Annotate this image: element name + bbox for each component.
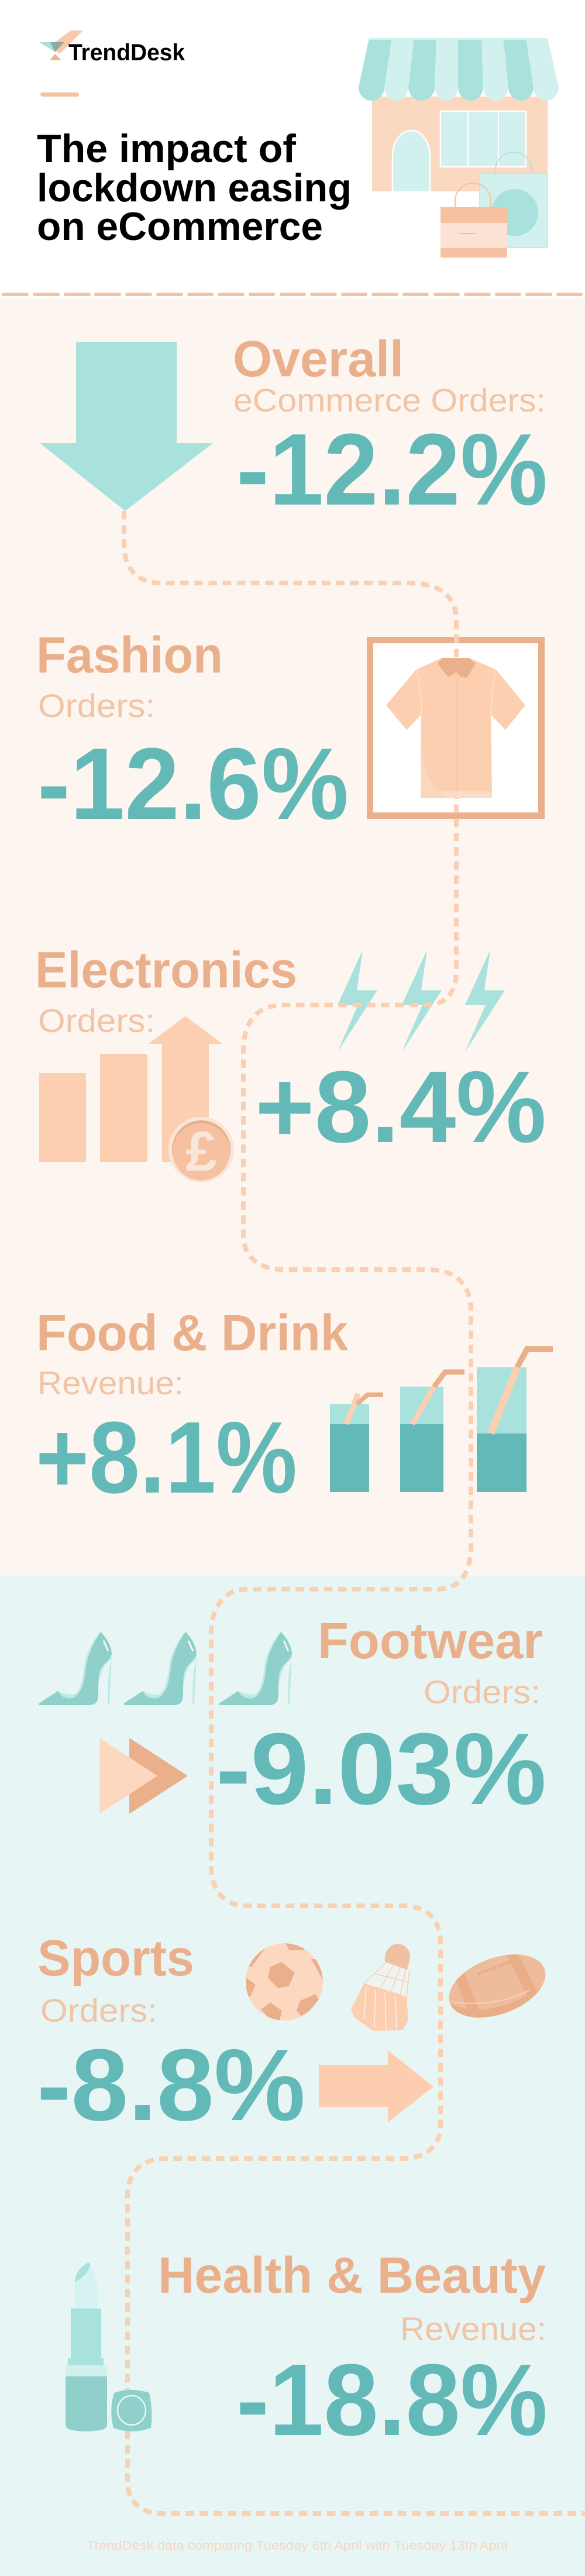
panel: footwear [39, 1613, 546, 1826]
divider: dashed [2, 293, 583, 296]
subheading: Orders: [38, 687, 155, 724]
awning [359, 38, 559, 101]
door [393, 131, 430, 192]
value: -12.6% [37, 726, 349, 841]
icon: lipstick [66, 2262, 107, 2431]
subheading: Orders: [424, 1673, 541, 1710]
panel: fashion [36, 627, 542, 841]
collar [438, 658, 476, 678]
frame [370, 640, 542, 816]
value: -8.8% [37, 2028, 305, 2142]
icon: down arrow [40, 342, 213, 511]
logo: TrendDesk [68, 40, 185, 66]
connector: dashed path [124, 511, 585, 2513]
subheading: Revenue: [37, 1364, 184, 1401]
title: lockdown easing [37, 166, 352, 210]
subheading: eCommerce Orders: [233, 382, 546, 419]
footer: source note: TrendDesk data comparing Tuesday 6th April with Tuesday 13th April [87, 2539, 507, 2553]
window [441, 111, 526, 167]
icon: glass 2 [400, 1372, 464, 1492]
arrow: double chevron [99, 1738, 188, 1814]
subheading: Orders: [38, 1002, 155, 1039]
value: -18.8% [236, 2342, 548, 2457]
heading: sports: Sports [37, 1930, 194, 1987]
icon: pound coin [168, 1117, 234, 1183]
accent bar [40, 92, 79, 97]
icon: glass 1 [330, 1394, 383, 1492]
icon: rugby ball [449, 1954, 545, 2018]
chart: rising bars with arrow [39, 1016, 223, 1162]
icon: lipstick compact [111, 2390, 152, 2431]
icon: shuttlecock [351, 1944, 410, 2031]
value: +8.4% [255, 1049, 546, 1164]
subheading: Orders: [40, 1992, 157, 2029]
logo [39, 30, 185, 66]
value: -12.2% [236, 412, 548, 526]
icon: high heel 2 [124, 1632, 197, 1705]
icon: lightning bolts [338, 950, 505, 1052]
value: -9.03% [216, 1711, 546, 1826]
subheading: Revenue: [400, 2310, 546, 2347]
icon: teal shopping bag [480, 152, 548, 248]
icon: peach shopping bag [441, 183, 507, 258]
icon: shop [359, 38, 559, 193]
icon: high heel 3 [219, 1632, 292, 1705]
panel: sports [37, 1930, 554, 2142]
panel: food and drink [36, 1305, 553, 1514]
icon: soccer ball [246, 1942, 323, 2021]
heading: fashion: Fashion [36, 627, 223, 684]
value: +8.1% [36, 1400, 297, 1514]
panel: health and beauty [66, 2247, 548, 2457]
heading: overall: Overall [233, 331, 404, 387]
title [37, 126, 352, 249]
icon: high heel 1 [39, 1632, 112, 1705]
panel: overall [40, 331, 548, 526]
heading: health and beauty: Health & Beauty [158, 2247, 546, 2304]
heading: footwear: Footwear [318, 1613, 543, 1669]
title: on eCommerce [37, 204, 323, 249]
panel: electronics [35, 942, 546, 1183]
icon: polo shirt [386, 658, 525, 798]
heading: food and drink: Food & Drink [36, 1305, 349, 1361]
arrow: right [319, 2050, 433, 2122]
header [37, 30, 559, 258]
heading: electronics: Electronics [35, 942, 297, 999]
title: The impact of [37, 126, 296, 171]
icon: pound coin: £ [185, 1120, 217, 1183]
icon: glass 3 [477, 1349, 553, 1492]
